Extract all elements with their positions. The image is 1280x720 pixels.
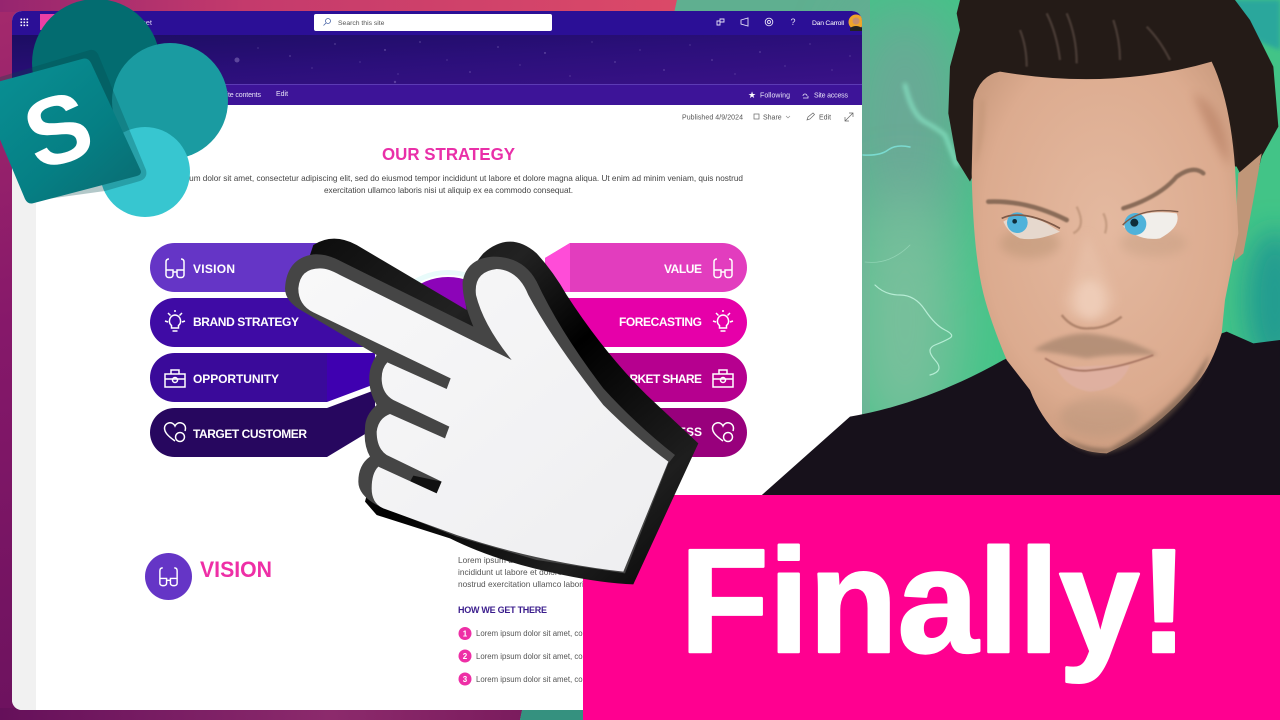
intro paragraph [190, 175, 742, 194]
site navigation bar: Following [760, 92, 790, 100]
3D pointing hand cursor [285, 239, 698, 584]
top suite bar: Dan Carroll [812, 20, 844, 27]
list item 2 [458, 650, 582, 662]
list item 2: 2 [463, 652, 468, 661]
vision body text [458, 557, 583, 587]
bar: target customer: TARGET CUSTOMER [193, 427, 307, 441]
vision section heading [145, 553, 272, 600]
list item 2: Lorem ipsum dolor sit amet, consectetur adipiscing elit [476, 652, 664, 661]
page command bar: Edit [819, 114, 831, 122]
chin stubble [1063, 353, 1210, 454]
logo tile [0, 58, 141, 204]
bar: brand strategy: BRAND STRATEGY [193, 315, 299, 329]
list item 3: 3 [463, 675, 468, 684]
presenter portrait [760, 0, 1280, 497]
hand outline [285, 254, 675, 573]
bar: market share [608, 353, 747, 402]
third finger gap [410, 476, 442, 493]
vision body text: Lorem ipsum dolor sit amet, consectetur adipiscing elit, sed do eiusmod tempor [458, 555, 749, 565]
page command bar: Published 4/9/2024 [682, 114, 743, 122]
shirt [760, 332, 1280, 497]
hair [948, 0, 1278, 197]
how we get there heading: HOW WE GET THERE [458, 605, 547, 615]
moustache stubble [1033, 333, 1158, 358]
list item 1: Lorem ipsum dolor sit amet, consectetur adipiscing elit [476, 629, 664, 638]
top suite bar: Intranet [127, 18, 153, 27]
background: green lightning storm [520, 0, 1280, 720]
waffle menu icon [20, 18, 28, 26]
center circle [414, 270, 467, 310]
headline: finally: Finally! [680, 519, 1188, 684]
search box: Search this site [338, 20, 385, 27]
list item 3 [458, 672, 582, 686]
brows [988, 170, 1203, 220]
bar: value: VALUE [664, 262, 702, 276]
vision body text: incididunt ut labore et dolore magna aliqua. Ut enim ad minim veniam, quis [458, 567, 732, 577]
right eye [1123, 211, 1178, 239]
list item 1 [458, 627, 582, 640]
face [972, 62, 1238, 453]
user avatar [848, 14, 864, 31]
nose [1062, 233, 1122, 328]
bar: opportunity [150, 353, 375, 402]
suite bar icons [717, 18, 773, 26]
heading: our strategy: OUR STRATEGY [382, 144, 515, 164]
bar: opportunity: OPPORTUNITY [193, 372, 279, 386]
ear [1234, 153, 1262, 262]
intro paragraph: Lorem ipsum dolor sit amet, consectetur adipiscing elit, sed do eiusmod tempor incididunt ut labore et dolore magna aliqua. Ut enim ad minim veniam, quis nostrud [153, 174, 743, 183]
bar: brand strategy [150, 298, 375, 347]
bar: vision: VISION [193, 262, 235, 276]
site navigation bar: Site access [814, 92, 848, 100]
page command bar [682, 113, 853, 122]
vision body text: nostrud exercitation ullamco laboris nisi ut aliquip ex ea commodo consequat. [458, 579, 743, 589]
bar: success [660, 408, 747, 457]
left app rail [12, 168, 36, 710]
list item 3: Lorem ipsum dolor sit amet, consectetur adipiscing elit [476, 675, 664, 684]
right strategy bars [545, 243, 747, 457]
logo letter S: S [12, 70, 104, 191]
top suite bar [12, 11, 864, 35]
site navigation bar [226, 84, 862, 105]
SharePoint logo [0, 0, 228, 217]
bar: success: SUCCESS [644, 425, 702, 439]
forehead shading [1193, 93, 1230, 167]
eye sockets [1000, 228, 1060, 258]
list item 1: 1 [463, 630, 468, 638]
vision section heading: VISION [200, 557, 272, 582]
mouth [1045, 355, 1153, 392]
bar: target customer [150, 390, 375, 457]
bar: market share: MARKET SHARE [612, 372, 702, 386]
bar: forecasting [568, 298, 747, 347]
pink title banner [583, 495, 1280, 720]
numbered list [458, 627, 582, 686]
page command bar: Share [763, 114, 782, 122]
site navigation bar: ★ [748, 90, 756, 100]
site navigation bar: Edit [276, 91, 288, 98]
starry site banner [12, 35, 862, 85]
SharePoint browser window [12, 11, 864, 710]
bar: vision [150, 243, 317, 292]
left eye [1002, 212, 1060, 239]
search box [314, 14, 552, 31]
site navigation bar: Site contents [222, 92, 262, 99]
bar: forecasting: FORECASTING [619, 315, 702, 329]
left strategy bars [150, 243, 375, 457]
intro paragraph: exercitation ullamco laboris nisi ut aliquip ex ea commodo consequat. [324, 186, 573, 195]
frown lines [1073, 207, 1106, 233]
hand extrusion [303, 239, 698, 584]
lightning bolts [863, 85, 957, 375]
bar: value [545, 243, 747, 292]
hand fill [298, 268, 668, 572]
top suite bar: ? [790, 17, 796, 27]
